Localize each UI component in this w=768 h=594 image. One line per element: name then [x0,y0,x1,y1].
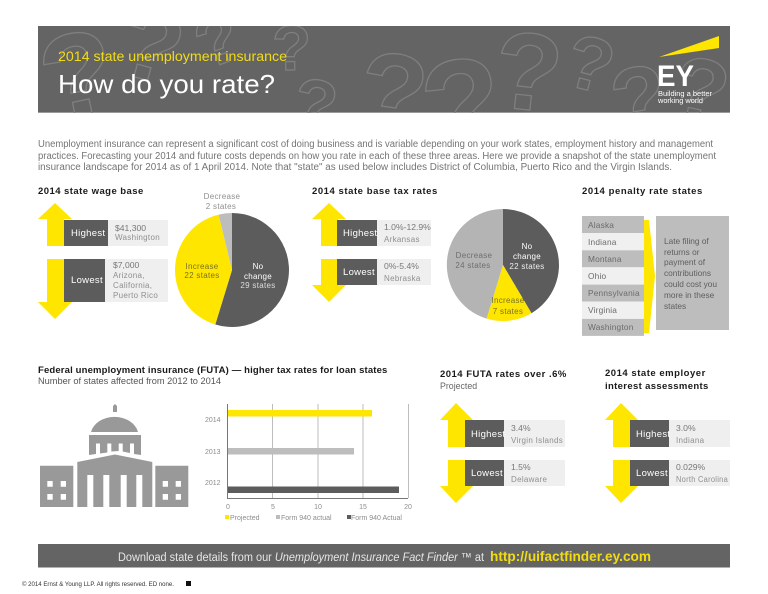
callout: more in these [664,290,715,300]
pie chart: wage base: 29 states [240,281,276,290]
lowest row with down arrow: California, [113,281,152,290]
highest row: Highest [636,429,670,440]
panel: 2014 FUTA rates [440,369,567,503]
pie chart: wage base: Increase [185,262,219,271]
bar chart: 5 [271,504,275,511]
heading: Federal unemployment insurance (FUTA) — higher tax rates for loan states [38,365,388,376]
lowest row with down arrow: 0.029% [676,462,706,472]
EY logo: working world [657,98,703,105]
callout: Late filing of [664,236,709,246]
EY logo: Building a better [658,91,713,98]
panel: 2014 state employer interest assessments [605,368,730,503]
pie chart: wage base [175,192,289,327]
highest row [64,220,168,246]
lowest row with down arrow: Lowest [471,468,503,479]
bar chart: 2014 [205,417,221,424]
subheading: Number of states affected from 2012 to 2014 [38,376,221,386]
state list: Indiana [588,237,617,247]
title: How do you rate? [58,69,275,99]
highest row: Arkansas [384,235,420,244]
bar chart: 20 [404,504,412,511]
panel: 2014 state base tax rates [312,186,559,321]
state list: Alaska [588,220,614,230]
pie chart: base tax rates [447,209,559,321]
black square [186,581,191,586]
highest row [465,420,565,447]
callout [656,216,729,330]
highest row: Indiana [676,436,705,445]
lowest row with down arrow: $7,000 [113,260,140,270]
state list [582,216,644,336]
lowest row with down arrow [38,259,168,319]
highest row [630,420,730,447]
highest row: Highest [471,429,505,440]
bar chart: 10 [314,504,322,511]
intro paragraph: insurance landscape for 2014 as of 1 April 2014. Note that "state" as used below includes District of Columbia, Puerto Rico and the Virgin Islands. [38,162,672,173]
intro paragraph: practices. Forecasting your 2014 and future costs depends on how you rate in each of these three areas. Here we provide a snapshot of the state unemployment [38,151,716,162]
intro paragraph [38,139,716,173]
pie chart: wage base: change [244,272,272,281]
heading: 2014 state wage base [38,186,144,197]
link: http://uifactfinder.ey.com [490,548,651,564]
state list: Virginia [588,305,617,315]
background question marks: ? [351,27,435,159]
icon: up arrow [38,203,72,246]
panel: 2014 penalty rate states [582,186,729,336]
legend: Projected [230,515,260,522]
copyright: © 2014 Ernst & Young LLP. All rights reserved. ED none. [22,580,174,588]
lowest row with down arrow: Delaware [511,475,547,484]
callout: contributions [664,268,711,278]
pie chart: wage base: 2 states [206,202,236,211]
heading [605,368,709,392]
background question marks: ? [489,8,568,137]
pie chart: wage base: No [253,262,264,271]
bar chart: 2012 [205,480,221,487]
lowest row with down arrow [440,460,565,503]
pie chart: base tax rates: 7 states [493,307,523,316]
bar: 2013 actual [228,448,354,454]
state list: Washington [588,322,634,332]
download text: Download state details from our Unemployment Insurance Fact Finder ™ at [118,552,485,564]
bar chart [205,404,412,522]
state list: Pennsylvania [588,288,640,298]
subheading: Projected [440,381,477,391]
lowest row with down arrow: 0%-5.4% [384,261,419,271]
heading: 2014 state employer [605,368,706,379]
subtitle: 2014 state unemployment insurance [58,49,287,64]
icon: up arrow [605,403,638,447]
pie chart: base tax rates: 24 states [455,261,491,270]
lowest row with down arrow: Lowest [636,468,668,479]
pie chart: base tax rates: change [513,252,541,261]
header banner [38,26,730,113]
heading: 2014 penalty rate states [582,186,703,197]
EY logo [657,36,719,105]
highest row: Washington [115,233,160,242]
bar chart: 0 [226,504,230,511]
lowest row with down arrow: Arizona, [113,271,145,280]
background question marks: ? [412,27,511,183]
highest row: Highest [343,228,377,239]
pie chart: base tax rates: Decrease [456,251,493,260]
background question marks: ? [28,2,128,149]
callout: states [664,301,686,311]
background question marks: ? [288,62,343,147]
legend [225,515,402,522]
lowest row with down arrow: Nebraska [384,274,421,283]
bar: 2012 actual [228,486,399,493]
callout: payment of [664,257,706,267]
legend: Form 940 Actual [351,515,402,522]
heading: interest assessments [605,381,709,392]
background question marks: ? [557,18,623,112]
pie chart: base tax rates: Increase [491,296,525,305]
pie chart: base tax rates: 22 states [509,262,545,271]
background question marks: ? [663,37,738,146]
highest row: Virgin Islands [511,436,563,445]
bar chart: 15 [359,504,367,511]
state list: Ohio [588,271,607,281]
lowest row with down arrow: North Carolina [676,475,728,484]
background question marks: ? [603,45,675,153]
panel: 2014 state wage base [38,186,289,327]
heading: 2014 state base tax rates [312,186,438,197]
pie chart: base tax rates: No [522,242,533,251]
highest row: 3.4% [511,423,531,433]
pie chart: wage base: Decrease [204,192,241,201]
highest row: 1.0%-12.9% [384,222,431,232]
lowest row with down arrow: 1.5% [511,462,531,472]
highest row [337,220,431,246]
icon: up arrow [440,403,473,447]
lowest row with down arrow [605,460,730,503]
arrow: pointer [644,220,655,333]
icon: capitol building [40,404,188,507]
legend: Form 940 actual [281,515,332,522]
background question marks [43,26,726,113]
lowest row with down arrow: Puerto Rico [113,291,158,300]
EY logo: EY [657,60,694,93]
heading: 2014 FUTA rates over .6% [440,369,567,380]
state list: Montana [588,254,622,264]
highest row: Highest [71,228,105,239]
footer banner [38,544,730,568]
bar: 2014 projected [228,410,372,416]
intro paragraph: Unemployment insurance can represent a significant cost of doing business and is variable depending on your work states, employment history and management [38,139,713,150]
panel: federal unemployment insurance [38,365,412,522]
bar chart: 2013 [205,449,221,456]
lowest row with down arrow: Lowest [343,267,375,278]
callout: could cost you [664,279,717,289]
lowest row with down arrow: Lowest [71,275,103,286]
pie chart: wage base: 22 states [184,271,220,280]
background question marks: ? [272,12,311,84]
highest row: $41,300 [115,223,146,233]
callout: returns or [664,247,700,257]
highest row: 3.0% [676,423,696,433]
lowest row with down arrow [312,259,431,302]
icon: up arrow [312,203,346,246]
